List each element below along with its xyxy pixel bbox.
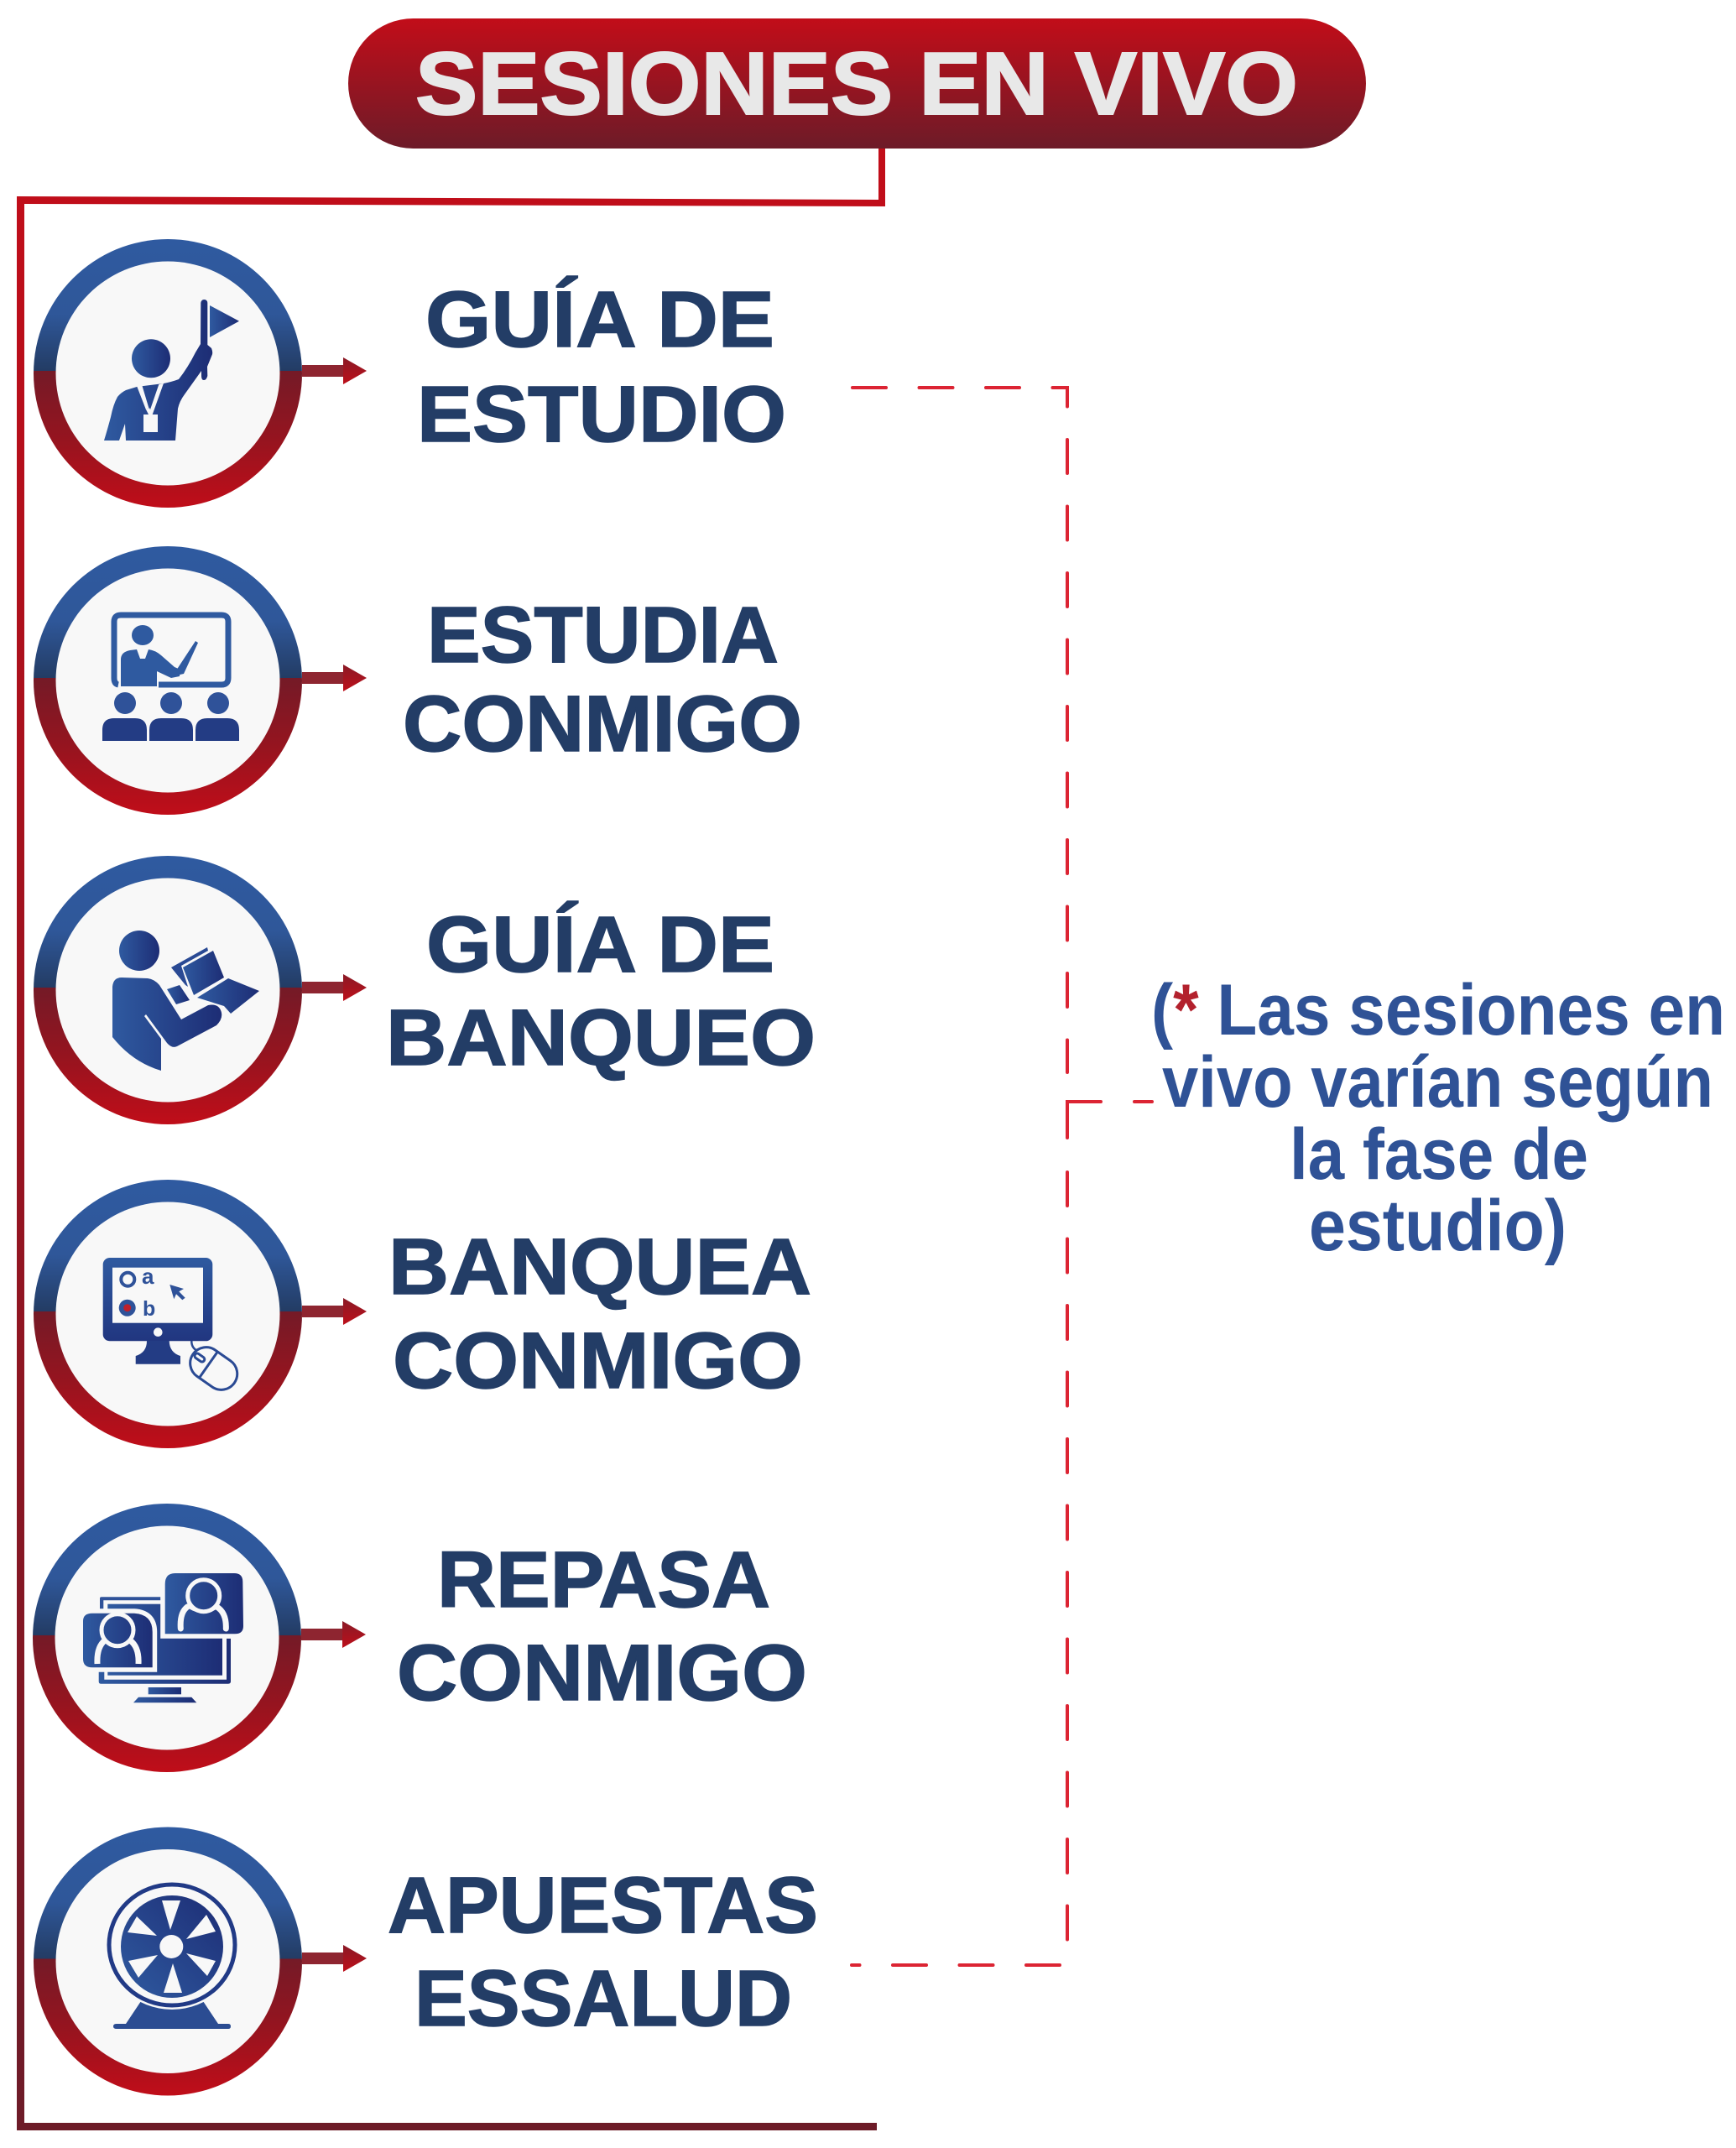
row: estudia conmigo: [34, 546, 802, 815]
label: REPASA: [437, 1535, 770, 1624]
arrow: [302, 1945, 367, 1972]
icon: computer quiz: b: [143, 1297, 155, 1321]
ring badge: [34, 239, 302, 508]
arrow: [302, 665, 367, 691]
label: CONMIGO: [403, 680, 802, 769]
label: ESTUDIO: [417, 370, 786, 459]
label: CONMIGO: [397, 1629, 807, 1718]
icon: teacher with audience: [102, 615, 239, 741]
note text: [1151, 970, 1725, 1266]
row: guía de banqueo: [34, 856, 816, 1124]
note text: estudio): [1309, 1186, 1567, 1266]
icon: computer quiz: a: [142, 1264, 154, 1289]
label: APUESTAS: [388, 1861, 818, 1950]
label: [388, 1223, 811, 1405]
dashed bracket: [852, 388, 1152, 1965]
arrow: [302, 974, 367, 1001]
icon: person reading: [112, 931, 259, 1071]
label: [417, 275, 786, 459]
ring badge: [34, 1180, 302, 1448]
label: [403, 591, 802, 769]
arrow: [302, 1298, 367, 1325]
label: BANQUEA: [388, 1223, 811, 1311]
title: SESIONES EN VIVO: [415, 34, 1298, 133]
label: GUÍA DE: [426, 900, 774, 989]
label: [386, 900, 816, 1082]
connector frame: [17, 149, 885, 2130]
arrow: [302, 357, 367, 384]
ring badge: [33, 1504, 301, 1772]
row: apuestas essalud: [34, 1827, 818, 2096]
label: BANQUEO: [386, 993, 816, 1082]
icon: video call monitor: [83, 1573, 243, 1702]
label: [397, 1535, 807, 1718]
label: [388, 1861, 818, 2043]
icon: prize wheel: [105, 1880, 239, 2029]
title pill: [348, 18, 1366, 149]
ring badge: [34, 546, 302, 815]
label: CONMIGO: [393, 1316, 803, 1405]
label: ESSALUD: [414, 1954, 792, 2043]
row: guía de estudio: [34, 239, 786, 508]
row: repasa conmigo: [33, 1504, 807, 1772]
ring badge: [34, 1827, 302, 2096]
icon: computer quiz: [103, 1258, 243, 1396]
icon: guide with flag: [104, 300, 239, 441]
note text: la fase de: [1290, 1114, 1588, 1195]
label: GUÍA DE: [425, 275, 774, 364]
row: banquea conmigo: [34, 1180, 811, 1448]
arrow: [301, 1621, 366, 1648]
ring badge: [34, 856, 302, 1124]
label: ESTUDIA: [427, 591, 779, 680]
